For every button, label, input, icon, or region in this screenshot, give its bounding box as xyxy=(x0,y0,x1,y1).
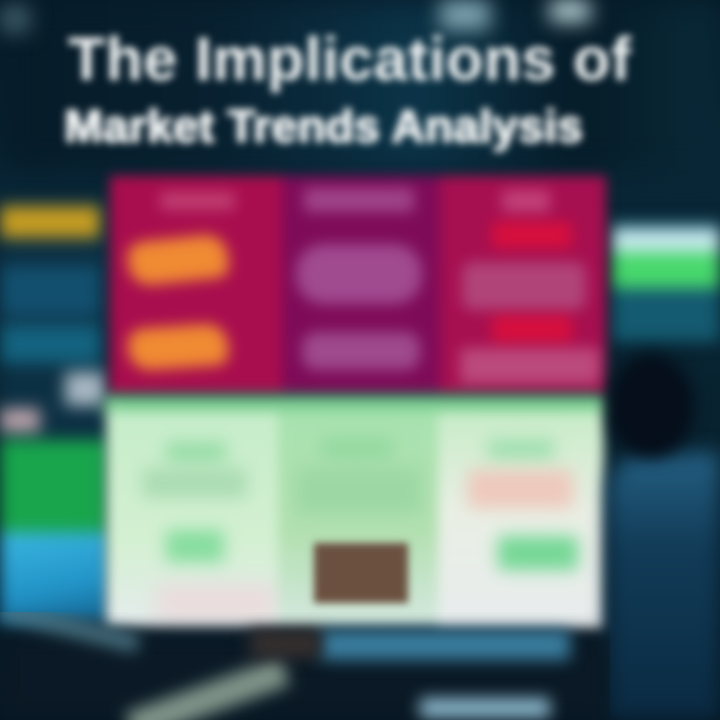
person silhouette xyxy=(591,348,720,720)
title xyxy=(60,25,637,158)
title: Market Trends Analysis xyxy=(64,100,583,152)
column 3 xyxy=(438,412,604,630)
column 1 pink tint xyxy=(156,584,276,620)
column 3 red band 1 xyxy=(492,222,572,248)
column 2 heading xyxy=(322,438,392,458)
column 3 heading xyxy=(502,190,550,212)
lower table: pale green section xyxy=(106,398,604,628)
column 2 xyxy=(282,176,440,394)
column 3 red band 2 xyxy=(492,316,572,342)
dark desk xyxy=(0,634,610,720)
left panel: blue block xyxy=(0,532,110,622)
brown centre box xyxy=(314,543,408,603)
column 1 xyxy=(110,176,282,394)
left side panel: dashboard strip xyxy=(0,200,112,630)
column 2 heading xyxy=(304,188,414,212)
right panel: light band xyxy=(612,228,720,254)
column 3 xyxy=(440,176,606,394)
left panel: green block xyxy=(0,440,108,532)
column 1 orange label 2 xyxy=(127,323,229,371)
column 2 cell 1 xyxy=(296,244,422,304)
head xyxy=(608,354,694,458)
left panel: orange heading xyxy=(0,206,100,238)
column 3 red text xyxy=(468,470,573,508)
column 2 cell 2 xyxy=(302,332,420,370)
right panel: green band xyxy=(612,252,720,288)
column 1 green label xyxy=(166,530,224,562)
blue arm xyxy=(320,630,570,660)
column 1 orange label 1 xyxy=(126,233,230,287)
column 3 cell 1 xyxy=(462,262,586,310)
left panel: blue data rows xyxy=(0,266,100,316)
column 3 heading xyxy=(488,440,554,458)
column 1 text xyxy=(142,468,247,498)
column 1 heading xyxy=(160,192,235,210)
column 3 cell 2 xyxy=(460,348,600,384)
desk foreground xyxy=(0,612,610,720)
column 2 text xyxy=(296,468,421,514)
hand xyxy=(250,630,320,658)
right side panel: green screen xyxy=(612,222,720,342)
blue lower highlight xyxy=(420,698,550,718)
column 1 xyxy=(106,412,278,628)
top green band xyxy=(106,398,604,414)
left edge highlight xyxy=(0,601,140,653)
light diagonal strip xyxy=(125,657,290,720)
upper table: magenta section xyxy=(110,176,606,394)
body xyxy=(608,452,720,720)
title: The Implications of xyxy=(68,25,631,93)
column 1 heading xyxy=(166,442,226,462)
column 2 xyxy=(278,412,438,628)
column 3 green label xyxy=(498,536,578,570)
